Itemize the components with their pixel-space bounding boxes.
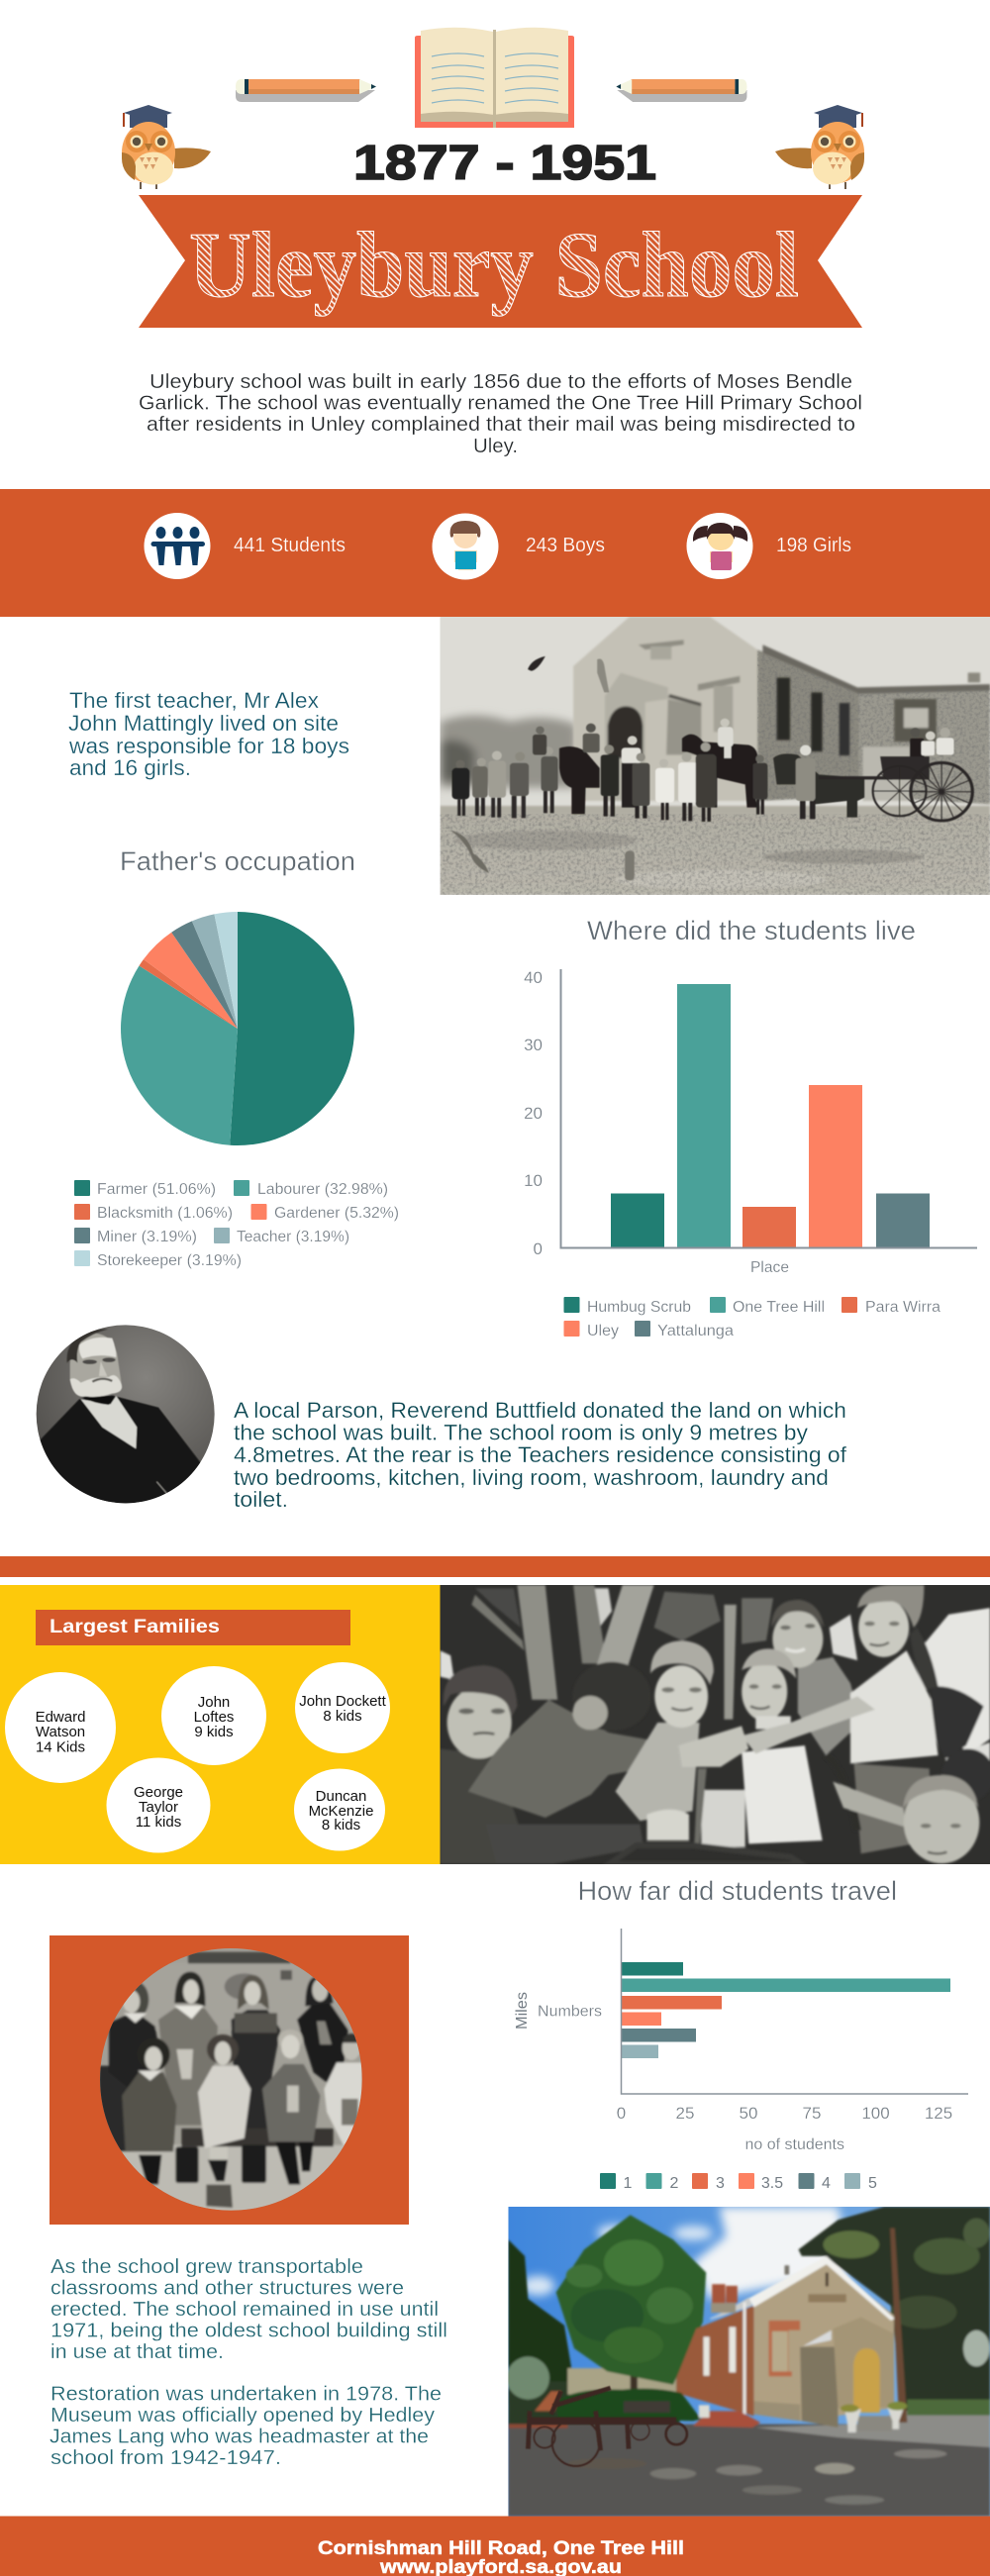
bar chart: where did the students live <box>524 968 977 1276</box>
panel: largest families <box>0 1585 440 1864</box>
ground <box>508 2425 990 2517</box>
text: restoration history: school from 1942-1947. <box>50 2447 281 2469</box>
legend: father's occupation: Miner (3.19%) <box>97 1229 197 1245</box>
family: Duncan McKenzie: Duncan <box>316 1788 366 1805</box>
text: restoration history: classrooms and other structures were <box>50 2277 404 2299</box>
bar chart: where did the students live: 20 <box>524 1104 543 1123</box>
panel: orange frame with girls knitting photo <box>50 1935 409 2225</box>
boy lower right <box>941 1748 990 1801</box>
back row girls <box>107 2015 158 2083</box>
legend: father's occupation <box>74 1180 399 1269</box>
bar chart: where did the students live: 40 <box>524 968 543 987</box>
text: Reverend Buttfield: A local Parson, Reverend Buttfield donated the land on which <box>234 1398 846 1423</box>
rusted farm machinery <box>528 2388 687 2466</box>
text: Reverend Buttfield: toilet. <box>234 1487 288 1512</box>
photo: girls knitting <box>100 1948 362 2211</box>
legend: how far did students travel: 1 <box>624 2175 632 2192</box>
boy on the right <box>850 1650 939 1763</box>
bar chart: where did the students live: Place <box>750 1259 789 1276</box>
legend: how far did students travel: 3.5 <box>761 2175 783 2192</box>
icon: left owl <box>122 105 211 189</box>
bar chart: how far did students travel <box>514 1929 968 2153</box>
intro paragraph: Uley. <box>473 436 518 457</box>
text: Reverend Buttfield: the school was built. The school room is only 9 metres by <box>234 1420 808 1445</box>
photo: Reverend Buttfield portrait <box>36 1325 215 1503</box>
intro paragraph: after residents in Unley complained that their mail was being misdirected to <box>147 414 855 436</box>
heading: father's occupation: Father's occupation <box>120 846 355 876</box>
bar chart: how far did students travel: 125 <box>925 2104 952 2123</box>
legend: where did the students live: Uley <box>587 1323 619 1339</box>
front row girls <box>122 2072 176 2151</box>
photo: pupils outside the school with horses <box>440 617 990 895</box>
legend: father's occupation: Teacher (3.19%) <box>237 1229 349 1245</box>
building <box>676 2306 754 2416</box>
text: first teacher <box>68 688 349 780</box>
family: John Dockett: 8 kids <box>323 1708 362 1725</box>
icon: open book <box>415 28 574 128</box>
legend: father's occupation: Storekeeper (3.19%) <box>97 1252 242 1269</box>
family: Edward Watson <box>5 1672 116 1783</box>
bar chart: how far did students travel: no of students <box>744 2136 844 2153</box>
bar chart: how far did students travel: Miles <box>514 1992 531 2030</box>
text: restoration history: Museum was officially opened by Hedley <box>50 2405 435 2427</box>
intro paragraph: Uleybury school was built in early 1856 due to the efforts of Moses Bendle <box>149 371 852 393</box>
text: restoration history: in use at that time. <box>50 2341 224 2363</box>
bar chart: where did the students live: 10 <box>524 1171 543 1190</box>
pole <box>890 2229 907 2423</box>
family: Duncan McKenzie: McKenzie <box>309 1803 373 1820</box>
text: Reverend Buttfield <box>234 1398 847 1512</box>
bar chart: how far did students travel: 25 <box>676 2104 694 2123</box>
bar chart: how far did students travel: 75 <box>803 2104 821 2123</box>
legend: where did the students live: One Tree Hill <box>733 1299 825 1316</box>
legs and boots <box>175 2146 199 2183</box>
icon: right owl <box>775 105 864 189</box>
bench <box>181 2129 334 2146</box>
family: George Taylor <box>107 1758 210 1853</box>
family: John Loftes: Loftes <box>194 1709 234 1726</box>
legend: father's occupation: Farmer (51.06%) <box>97 1181 216 1198</box>
family: George Taylor: Taylor <box>139 1799 178 1816</box>
stat: students: 441 Students <box>234 535 346 556</box>
text: restoration history: erected. The school remained in use until <box>50 2299 439 2321</box>
text: restoration history: As the school grew transportable <box>50 2256 363 2278</box>
legend: where did the students live: Humbug Scrub <box>587 1299 691 1316</box>
icon: girl <box>687 513 752 579</box>
title: Uleybury School <box>189 214 799 317</box>
sky gaps between foliage <box>924 1608 990 1755</box>
footer address: Cornishman Hill Road, One Tree Hill <box>318 2538 684 2559</box>
bar chart: how far did students travel: Numbers <box>538 2004 602 2020</box>
boy in white shirt <box>742 1745 823 1843</box>
boy far left <box>440 1748 532 1864</box>
family: Duncan McKenzie <box>294 1768 385 1851</box>
family: George Taylor: 11 kids <box>136 1814 181 1831</box>
legend: how far did students travel: 5 <box>868 2175 877 2192</box>
bar chart: where did the students live: 30 <box>524 1036 543 1054</box>
cart <box>819 756 972 821</box>
horses <box>559 735 864 818</box>
text: first teacher: John Mattingly lived on site <box>68 711 339 736</box>
family: Edward Watson: 14 Kids <box>36 1738 85 1756</box>
legend: where did the students live <box>564 1297 940 1339</box>
icon: right pencil <box>616 79 746 102</box>
photo: restored school building <box>508 2207 990 2517</box>
text: restoration history <box>50 2256 447 2469</box>
stat: boys: 243 Boys <box>526 535 605 556</box>
legend: father's occupation: Labourer (32.98%) <box>257 1181 388 1198</box>
boy two: jumper and dark hair <box>468 1700 675 1818</box>
stat: girls: 198 Girls <box>776 535 851 556</box>
legend: where did the students live: Para Wirra <box>865 1299 940 1316</box>
text: restoration history: James Lang who was headmaster at the <box>50 2426 429 2447</box>
panel: student statistics band <box>0 489 990 617</box>
legend: where did the students live: Yattalunga <box>657 1323 734 1339</box>
intro paragraph: Garlick. The school was eventually renamed the One Tree Hill Primary School <box>139 392 862 414</box>
date range heading: 1877 - 1951 <box>353 137 656 190</box>
family: George Taylor: George <box>134 1784 183 1801</box>
legend: father's occupation: Gardener (5.32%) <box>274 1205 399 1222</box>
bar chart: how far did students travel: 0 <box>617 2104 626 2123</box>
family: John Loftes: 9 kids <box>194 1724 234 1740</box>
family: John Loftes: John <box>198 1694 230 1711</box>
title banner <box>139 195 862 328</box>
heading: how far did students travel: How far did students travel <box>578 1876 897 1906</box>
legend: how far did students travel: 4 <box>822 2175 831 2192</box>
trees <box>798 2207 990 2411</box>
text: first teacher: The first teacher, Mr Alex <box>69 688 319 713</box>
boy three <box>616 1723 700 1821</box>
text: restoration history: 1971, being the oldest school building still <box>50 2321 447 2342</box>
text: Reverend Buttfield: two bedrooms, kitchen, living room, washroom, laundry and <box>234 1465 829 1490</box>
icon: students <box>145 513 210 579</box>
heading: largest families <box>36 1610 350 1645</box>
bar chart: how far did students travel: 50 <box>740 2104 757 2123</box>
patterned shirt boy <box>798 1657 861 1755</box>
icon: boy <box>432 513 499 580</box>
children <box>452 719 954 822</box>
family: John Loftes <box>161 1666 266 1765</box>
legend: how far did students travel: 2 <box>669 2175 679 2192</box>
family: Edward Watson: Edward <box>36 1709 85 1726</box>
family: Duncan McKenzie: 8 kids <box>322 1817 360 1833</box>
hedge <box>556 2389 701 2421</box>
icon: left pencil <box>236 79 376 102</box>
steps and urns <box>693 2411 760 2427</box>
family: John Dockett: John Dockett <box>299 1693 387 1710</box>
text: first teacher: was responsible for 18 boys <box>68 734 349 758</box>
intro paragraph <box>139 371 862 457</box>
divider band <box>0 1556 990 1577</box>
family: John Dockett <box>295 1662 390 1753</box>
photo: children on play equipment <box>440 1585 990 1864</box>
heading: where did the students live: Where did the students live <box>587 916 916 945</box>
legend: father's occupation: Blacksmith (1.06%) <box>97 1205 233 1222</box>
legend: how far did students travel <box>600 2173 877 2192</box>
footer band <box>0 2517 990 2576</box>
pie chart: father's occupation <box>121 912 354 1145</box>
bar chart: where did the students live: 0 <box>534 1239 543 1258</box>
text: restoration history: Restoration was undertaken in 1978. The <box>50 2384 442 2406</box>
text: first teacher: and 16 girls. <box>69 755 191 780</box>
hands and can <box>678 1726 748 1767</box>
heading: largest families: Largest Families <box>50 1616 220 1637</box>
bar chart: how far did students travel: 100 <box>861 2104 890 2123</box>
text: Reverend Buttfield: 4.8metres. At the rear is the Teachers residence consisting of <box>234 1442 847 1467</box>
family: Edward Watson: Watson <box>36 1724 85 1740</box>
legend: how far did students travel: 3 <box>716 2175 725 2192</box>
